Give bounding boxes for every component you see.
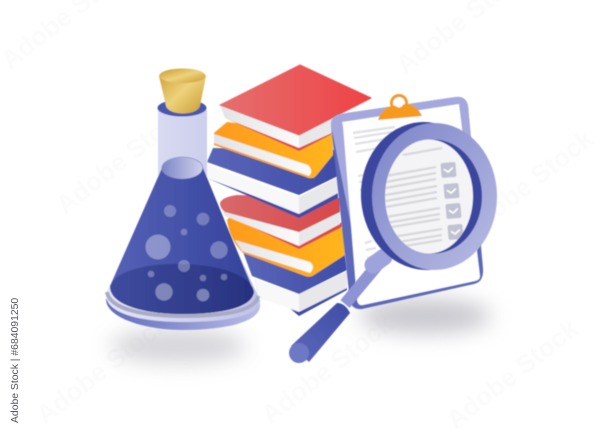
lens inner rim [385, 140, 482, 254]
bubbles [146, 205, 228, 301]
flask glass body [106, 110, 260, 322]
watermark text: Adobe Stock [440, 313, 584, 432]
book 3: blue book [207, 148, 338, 218]
handle shaft [345, 262, 380, 304]
flask base [106, 285, 260, 330]
liquid body [110, 157, 254, 314]
flask [106, 68, 260, 330]
glass rim [107, 292, 258, 316]
clipboard [331, 96, 483, 309]
book 5: orange book [227, 210, 345, 277]
list lines [380, 148, 442, 250]
handle collar [373, 257, 384, 265]
watermark text: Adobe Stock [30, 308, 174, 430]
paper [342, 104, 480, 305]
clip [378, 96, 422, 120]
checkbox 3 [445, 203, 462, 219]
watermark text: Adobe Stock [50, 98, 194, 220]
magnifier and clipboard shadow [359, 299, 491, 333]
liquid dark bottom [110, 264, 254, 314]
checkbox 1 [440, 162, 457, 178]
paper lines [353, 127, 395, 266]
book 1: red top book [220, 65, 371, 151]
watermark text: Adobe Stock [455, 123, 599, 245]
cork [159, 68, 206, 114]
book 4: red book [220, 195, 342, 249]
flask shadow [110, 329, 246, 363]
lens glass with list [384, 138, 474, 254]
book stack [207, 65, 371, 316]
stock id caption: Adobe Stock | #684091250 [10, 298, 21, 423]
book 2: orange book [214, 122, 333, 178]
lens back rim [356, 118, 494, 274]
liquid surface [162, 157, 202, 179]
magnifier [285, 118, 497, 367]
watermark text: Adobe Stock [255, 308, 399, 430]
checkbox 2 [443, 183, 460, 199]
handle grip [285, 303, 350, 367]
illustration: flask, books and clipboard with magnifier [10, 64, 498, 423]
neck ring [158, 100, 206, 116]
clipboard top lavender edge [331, 97, 480, 270]
book 6: blue bottom book [243, 240, 347, 316]
clipboard back frame [331, 97, 483, 309]
lens ring [372, 123, 497, 270]
checkbox 4 [447, 224, 464, 240]
